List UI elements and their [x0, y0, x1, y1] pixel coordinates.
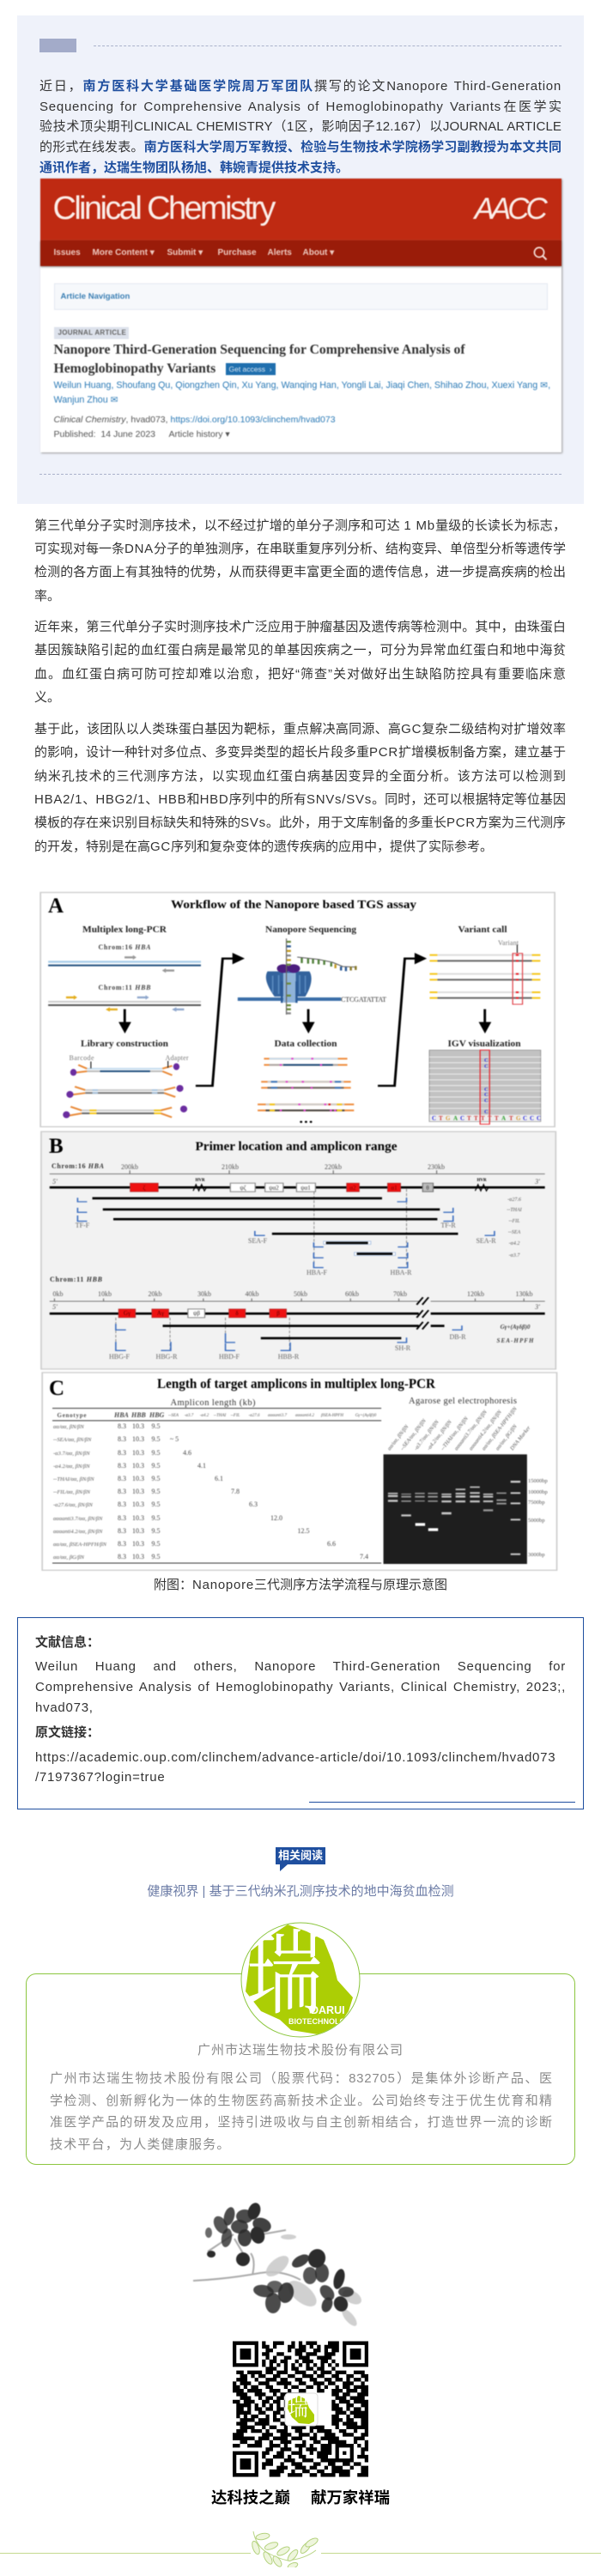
journal screenshot: Article history ▾: [168, 429, 230, 439]
journal screenshot: Wanjun Zhou ✉: [53, 395, 118, 405]
panel B labels: 230kb: [428, 1163, 445, 1171]
panel B labels: DB-R: [449, 1333, 466, 1341]
gel size labels: 5000bp: [528, 1518, 544, 1524]
related article link: 健康视界 | 基于三代纳米孔测序技术的地中海贫血检测: [147, 1884, 454, 1899]
HBA axis and gene line: [50, 1170, 545, 1191]
panel B labels: 50kb: [294, 1290, 307, 1298]
panel A labels: Chrom:16 HBA: [98, 943, 151, 951]
panel B labels: SEA-HPFH: [496, 1337, 534, 1344]
panel B labels: 130kb: [515, 1290, 532, 1298]
panel B labels: --SEA: [508, 1230, 520, 1235]
panel B labels: 70kb: [393, 1290, 407, 1298]
figure: workflow, primers and amplicons: [39, 891, 558, 1571]
panel B labels: 120kb: [467, 1290, 484, 1298]
citation text: Weilun Huang and others, Nanopore Third-Generation Sequencing for: [35, 1659, 566, 1674]
journal nav bar: [39, 240, 562, 266]
table values: 8.3: [118, 1540, 126, 1548]
gel size labels: 3000bp: [528, 1552, 544, 1558]
panel A labels: Chrom:11 HBB: [98, 984, 151, 991]
icon: Darui logo: BIOTECHNOLOGY: [288, 2017, 357, 2026]
table genotypes: -α27.6/αα, βN/βN: [53, 1502, 93, 1508]
table values: 10.3: [132, 1475, 144, 1482]
text block: intro paragraph: 通讯作者，达瑞生物团队杨旭、韩婉青提供技术支持。: [39, 161, 349, 175]
gel lane labels: αα/αα, βSEA-HPFH/βN: [481, 1406, 519, 1452]
panel B labels: α1: [391, 1185, 398, 1191]
leaves: [263, 2234, 364, 2328]
text block: body paragraph 3: 的开发，特别是在高GC序列和复杂变体的遗传疾病的应用中，提供了实际参考。: [34, 839, 493, 854]
panel B labels: TF-F: [76, 1221, 90, 1229]
slogan: 献万家祥瑞: [311, 2486, 390, 2508]
table genotypes: αα/αα, βG/βN: [53, 1555, 85, 1561]
slogan: 达科技之巅: [211, 2486, 290, 2508]
panel: company profile: [26, 1973, 575, 2165]
company description: [50, 2071, 552, 2152]
library strands: [64, 1061, 175, 1118]
table header: --FIL: [231, 1414, 240, 1418]
gel size labels: [528, 1478, 548, 1558]
journal screenshot: [39, 179, 562, 452]
text block: body paragraph 3: 基于此，该团队以人类珠蛋白基因为靶标，重点解决高同源、高GC复杂二级结构对扩增效率: [34, 722, 566, 736]
text block: body paragraph 1: [34, 518, 566, 603]
gel size labels: 10000bp: [528, 1489, 548, 1495]
text block: intro paragraph: 近日，南方医科大学基础医学院周万军团队撰写的论文Nanopore Third-Generation: [39, 79, 562, 94]
panel: reference info: [17, 1617, 584, 1809]
table values: 9.5: [151, 1475, 160, 1482]
gel lane labels: [386, 1406, 532, 1452]
gel lane labels: --THAI/αα, βN/βN: [440, 1415, 470, 1452]
journal header bar: [39, 179, 562, 240]
gel lane labels: αααanti3.7/αα, βN/βN: [453, 1409, 489, 1452]
table values: 8.3: [118, 1553, 126, 1561]
panel B labels: HBG-F: [109, 1353, 131, 1361]
gel lane labels: -α4.2/αα, βN/βN: [426, 1419, 453, 1452]
panel A labels: Data collection: [275, 1039, 337, 1049]
gel size labels: 7500bp: [528, 1500, 544, 1506]
text block: body paragraph 2: [34, 620, 566, 705]
panel B labels: HVR: [477, 1179, 487, 1183]
panel B labels: Chrom:16 HBA: [52, 1162, 105, 1170]
table values: 10.3: [132, 1500, 144, 1508]
icon: ink flower branch: [192, 2203, 362, 2326]
table values: 9.5: [151, 1488, 160, 1495]
table values: ~ 5: [170, 1435, 179, 1443]
panel B labels: 20kb: [148, 1290, 161, 1298]
panel B labels: Gγ+(Aγδβ)0: [501, 1324, 531, 1330]
table values: 9.5: [151, 1500, 160, 1508]
table values: 8.3: [118, 1435, 126, 1443]
source link url: https://academic.oup.com/clinchem/advance-article/doi/10.1093/clinchem/hvad073: [35, 1750, 555, 1765]
company description: 技术平台，为人类健康服务。: [50, 2137, 231, 2152]
table values: 8.3: [118, 1488, 126, 1495]
table values: 4.6: [183, 1449, 191, 1457]
text block: intro paragraph: 的形式在线发表。南方医科大学周万军教授、检验与生物技术学院杨学习副教授为本文共同: [39, 140, 562, 155]
nanopore illustration: [238, 938, 357, 1015]
panel C labels: C: [49, 1377, 64, 1400]
panel A labels: Barcode: [69, 1054, 94, 1062]
panel B labels: δ: [235, 1310, 239, 1317]
table header: Gγ+(Aγδβ)0: [355, 1414, 377, 1418]
panel B labels: SH-R: [395, 1344, 411, 1352]
table values: 10.3: [132, 1553, 144, 1561]
table values: 10.3: [132, 1514, 144, 1522]
icon: leaf sprig: [252, 2531, 319, 2567]
journal name: Clinical Chemistry: [53, 191, 274, 227]
panel A labels: Nanopore Sequencing: [265, 924, 357, 935]
table values: 10.3: [132, 1462, 144, 1470]
AACC logo: AACC: [474, 192, 544, 226]
related reading tag: 相关阅读: [278, 1849, 323, 1862]
panel B labels: 3': [534, 1178, 540, 1185]
citation: Clinical Chemistry, hvad073, https://doi.org/10.1093/clinchem/hvad073: [53, 415, 336, 425]
table header: HBB: [131, 1411, 147, 1419]
panel B labels: β: [276, 1310, 280, 1317]
journal article tag: JOURNAL ARTICLE: [58, 329, 126, 336]
text block: body paragraph 2: 血。血红蛋白病可防可控却难以治愈，把好“筛查”关对做好出生缺陷防控具有重要临床意: [34, 667, 566, 682]
panel B labels: 60kb: [345, 1290, 359, 1298]
table values: 9.5: [151, 1527, 160, 1535]
table header: -α27.6: [248, 1414, 260, 1418]
text block: intro paragraph: 验技术顶尖期刊CLINICAL CHEMISTRY（1区，影响因子12.167）以JOURNAL ARTICLE: [39, 119, 562, 134]
arrow: data to variant call: [378, 953, 427, 1086]
text block: body paragraph 1: 第三代单分子实时测序技术，以不经过扩增的单分子测序和可达 1 Mb量级的长读长为标志，: [34, 518, 566, 533]
panel B labels: HVR: [195, 1179, 205, 1183]
table header: αααanti3.7: [268, 1414, 287, 1418]
panel B labels: 5': [52, 1178, 58, 1185]
table genotypes: --FIL/αα, βN/βN: [53, 1489, 91, 1495]
journal nav bar: About ▾: [302, 248, 334, 258]
panel B labels: -α27.6: [507, 1197, 521, 1203]
journal nav bar: Purchase: [218, 248, 257, 258]
table header: HBG: [149, 1411, 165, 1419]
panel A labels: CTCGATATTAT: [341, 996, 386, 1003]
table genotypes: [53, 1424, 107, 1561]
branch: [193, 2230, 300, 2281]
table header: αααanti4.2: [295, 1414, 314, 1418]
arrow: library to sequencing: [196, 953, 245, 1086]
table values: 8.3: [118, 1449, 126, 1457]
panel A labels: CCCCCC: [484, 1058, 489, 1115]
panel B labels: 0kb: [53, 1290, 64, 1298]
panel B labels: 5': [52, 1303, 58, 1311]
panel B labels: ζ: [143, 1185, 146, 1191]
table header: HBA: [113, 1411, 130, 1419]
text block: intro paragraph: [39, 79, 562, 175]
gel image: [384, 1454, 527, 1564]
table genotypes: αααanti3.7/αα, βN/βN: [53, 1516, 103, 1522]
table values: [118, 1422, 368, 1561]
table values: 9.5: [151, 1435, 160, 1443]
panel B labels: θ: [426, 1185, 429, 1191]
adapter motor proteins: [63, 1064, 187, 1118]
gel size labels: 15000bp: [528, 1478, 548, 1484]
company description: 广州市达瑞生物技术股份有限公司（股票代码：832705）是集体外诊断产品、医: [50, 2071, 552, 2086]
panel B labels: SEA-F: [248, 1237, 268, 1245]
arrow: down to data collection: [302, 1009, 315, 1033]
panel C labels: Agarose gel electrophoresis: [409, 1397, 517, 1406]
table values: 8.3: [118, 1514, 126, 1522]
table genotypes: -α4.2/αα, βN/βN: [53, 1464, 90, 1470]
panel C: length of target amplicons: [42, 1373, 557, 1570]
underline accent: [309, 1802, 575, 1803]
table genotypes: --SEA/αα, βN/βN: [53, 1437, 92, 1443]
table header: -α4.2: [200, 1414, 209, 1418]
QR code: [233, 2342, 368, 2477]
HBB amplicon bars: [163, 1324, 445, 1339]
panel B labels: α2: [349, 1185, 356, 1191]
article title: Nanopore Third-Generation Sequencing for Comprehensive Analysis of: [53, 342, 465, 357]
gel lane labels: -α3.7/αα, βN/βN: [413, 1419, 440, 1452]
table values: 7.4: [360, 1553, 368, 1561]
panel B labels: 220kb: [325, 1163, 342, 1171]
panel B labels: TF-R: [440, 1221, 456, 1229]
panel C labels: [49, 1377, 548, 1561]
table values: 6.3: [249, 1500, 258, 1508]
text block: body paragraph 1: 率。: [34, 589, 60, 603]
panel B labels: Primer location and amplicon range: [196, 1140, 398, 1154]
HBB strands: [48, 995, 201, 1012]
panel B labels: Aγ: [157, 1310, 164, 1317]
journal article tag: [53, 327, 129, 339]
tag block: [39, 39, 76, 52]
table genotypes: αα/αα, βN/βN: [53, 1424, 84, 1430]
table values: 10.3: [132, 1422, 144, 1430]
panel B: primer location and amplicon range: [41, 1131, 555, 1369]
gel lane labels: αα/αα, βG/βN: [495, 1423, 519, 1452]
text block: body paragraph 2: 近年来，第三代单分子实时测序技术广泛应用于肿瘤基因及遗传病等检测中。其中，由珠蛋白: [34, 620, 566, 634]
panel B labels: 10kb: [98, 1290, 112, 1298]
table header: --THAI: [214, 1414, 227, 1418]
panel B labels: HBB-R: [278, 1353, 300, 1361]
authors: Weilun Huang, Shoufang Qu, Qiongzhen Qin, Xu Yang, Wanqing Han, Yongli Lai, Jiaqi Chen, Shihao Zhou, Xuexi Yang ✉,: [53, 380, 550, 391]
HBB primers: [116, 1324, 462, 1350]
arrow: down to IGV: [479, 1009, 491, 1033]
table values: 8.3: [118, 1462, 126, 1470]
data collection reads: [258, 1058, 354, 1111]
icon: search: [532, 245, 548, 261]
table genotypes: --THAI/αα, βN/βN: [53, 1476, 94, 1482]
get access button: Get access ›: [228, 365, 272, 373]
article navigation box: Article Navigation: [60, 292, 130, 301]
citation text: [35, 1659, 566, 1715]
table values: 10.3: [132, 1527, 144, 1535]
panel B labels: --THAI: [507, 1208, 523, 1213]
table header: -α3.7: [185, 1414, 194, 1418]
panel: intro background: [17, 15, 584, 504]
slogan: [211, 2486, 390, 2508]
HBA guide lines: [314, 1189, 406, 1264]
text block: body paragraph 2: 基因簇缺陷引起的血红蛋白病是最常见的单基因疾病之一，可分为异常血红蛋白和地中海贫: [34, 643, 566, 658]
table values: 9.5: [151, 1553, 160, 1561]
panel B labels: 210kb: [222, 1163, 239, 1171]
text block: intro paragraph: Sequencing for Comprehensive Analysis of Hemoglobinopathy Variants在医学实: [39, 100, 562, 114]
table values: 10.3: [132, 1435, 144, 1443]
panel A labels: A: [48, 894, 64, 918]
panel B labels: -α4.2: [509, 1240, 519, 1246]
icon: QR center logo: [285, 2392, 318, 2426]
panel B labels: ψα2: [269, 1185, 279, 1191]
table values: 7.8: [231, 1488, 240, 1495]
icon: Darui logo: DARUI: [311, 2004, 345, 2016]
company description: 准医学产品的研发及应用，坚持引进吸收与自主创新相结合，打造世界一流的诊断: [50, 2115, 552, 2130]
panel A: workflow of the Nanopore based TGS assay: [40, 893, 555, 1127]
article navigation box: [53, 283, 548, 310]
figure caption: 附图：Nanopore三代测序方法学流程与原理示意图: [154, 1578, 447, 1592]
table values: 10.3: [132, 1449, 144, 1457]
table values: 6.1: [215, 1475, 223, 1482]
table header: [57, 1411, 377, 1419]
text block: body paragraph 3: HBA2/1、HBG2/1、HBB和HBD序列中的所有SNVs/SVs。同时，还可以根据特定等位基因: [34, 792, 566, 807]
panel A labels: Variant: [498, 939, 519, 947]
heading: reference info: 文献信息：: [35, 1635, 100, 1650]
panel B labels: 200kb: [121, 1163, 138, 1171]
journal screenshot: Hemoglobinopathy Variants: [53, 361, 216, 376]
HBA strands: [48, 955, 201, 973]
table values: 9.5: [151, 1422, 160, 1430]
table genotypes: αα/αα, βSEA-HPFH/βN: [53, 1542, 107, 1548]
HBA amplicon bars: [93, 1197, 458, 1256]
panel A labels: Multiplex long-PCR: [82, 924, 167, 935]
table values: 12.5: [297, 1527, 309, 1535]
company name: 广州市达瑞生物技术股份有限公司: [197, 2043, 404, 2058]
source link url: /7197367?login=true: [35, 1770, 165, 1785]
table header: Genotype: [57, 1412, 86, 1419]
published date: Published: 14 June 2023: [53, 429, 155, 439]
ellipsis dots: [300, 1121, 313, 1123]
table values: 10.3: [132, 1540, 144, 1548]
table values: 9.5: [151, 1449, 160, 1457]
IGV plot: [429, 1050, 541, 1124]
panel B labels: --FIL: [508, 1219, 520, 1224]
table header: --SEA: [168, 1414, 179, 1418]
panel B labels: HBA-R: [391, 1269, 412, 1276]
panel B labels: -α3.7: [509, 1253, 520, 1258]
panel A labels: C T G A C TTTTT A T G CCC: [432, 1115, 541, 1122]
panel B labels: HBA-F: [307, 1269, 328, 1276]
HBB guide lines: [116, 1318, 289, 1350]
text block: body paragraph 1: 可实现对每一条DNA分子的单独测序，在串联重复序列分析、结构变异、单倍型分析等遗传学: [34, 542, 566, 556]
table values: 12.0: [270, 1514, 282, 1522]
get access button: [225, 363, 275, 375]
table values: 8.3: [118, 1422, 126, 1430]
journal nav bar: More Content ▾: [93, 248, 155, 258]
journal nav bar: Alerts: [268, 248, 292, 258]
panel B labels: B: [49, 1135, 64, 1158]
panel B labels: ψβ: [193, 1310, 200, 1317]
table header: βSEA-HPFH: [320, 1414, 343, 1418]
table values: 10.3: [132, 1488, 144, 1495]
text block: body paragraph 2: 义。: [34, 690, 60, 705]
table values: 4.1: [197, 1462, 206, 1470]
panel A labels: Workflow of the Nanopore based TGS assay: [171, 899, 416, 912]
table values: 8.3: [118, 1500, 126, 1508]
panel C labels: Amplicon length (kb): [170, 1398, 256, 1408]
text block: body paragraph 1: 检测的各方面上有其独特的优势，从而获得更丰富更全面的遗传信息，进一步提高疾病的检出: [34, 565, 566, 579]
table values: 6.6: [327, 1540, 336, 1548]
citation text: hvad073,: [35, 1700, 94, 1715]
related reading tag: [276, 1847, 325, 1871]
text block: body paragraph 3: 纳米孔技术的三代测序方法，以实现血红蛋白病基因变异的全面分析。该方法可以检测到: [34, 769, 566, 784]
panel B labels: [49, 1135, 540, 1361]
gel lane labels: αα/αα, βN/βN: [386, 1423, 410, 1452]
gel lane labels: αααanti4.2/αα, βN/βN: [468, 1409, 503, 1452]
text block: body paragraph 3: 模板的存在来识别目标缺失和特殊的SVs。此外，用于文库制备的多重长PCR方案为三代测序: [34, 815, 566, 830]
table values: 8.3: [118, 1475, 126, 1482]
HBB axis and gene line: [50, 1299, 545, 1318]
arrow: down to library: [118, 1009, 131, 1033]
panel B labels: Chrom:11 HBB: [50, 1276, 103, 1283]
top dashed rule: [94, 45, 562, 46]
panel B labels: HBD-F: [219, 1353, 240, 1361]
icon: Darui logo: [240, 1923, 361, 2038]
panel B labels: Gγ: [124, 1310, 131, 1317]
panel B labels: ψα1: [300, 1185, 311, 1191]
text block: body paragraph 3: [34, 722, 566, 854]
table genotypes: αααanti4.2/αα, βN/βN: [53, 1529, 103, 1535]
panel A labels: Adapter: [165, 1054, 189, 1062]
citation text: Comprehensive Analysis of Hemoglobinopathy Variants, Clinical Chemistry, 2023;,: [35, 1680, 566, 1694]
nav items: Issues: [53, 248, 81, 258]
source link url: [35, 1750, 555, 1785]
table values: 9.5: [151, 1462, 160, 1470]
panel C labels: Length of target amplicons in multiplex long-PCR: [157, 1377, 436, 1391]
gel lane labels: --SEA/αα, βN/βN: [399, 1417, 428, 1452]
panel A labels: [48, 894, 541, 1122]
variant reads: [429, 945, 540, 1004]
text block: body paragraph 3: 的影响，设计一种针对多位点、多变异类型的超长片段多重PCR扩增模板制备方案，建立基于: [34, 745, 566, 760]
footer divider with leaves: [0, 2531, 601, 2567]
panel B labels: HBG-R: [156, 1353, 178, 1361]
table values: 9.5: [151, 1540, 160, 1548]
table values: 8.3: [118, 1527, 126, 1535]
table genotypes: -α3.7/αα, βN/βN: [53, 1451, 90, 1457]
panel A labels: Library construction: [81, 1039, 168, 1049]
axis break marks: [416, 1296, 431, 1330]
panel B labels: 30kb: [197, 1290, 211, 1298]
panel A labels: Variant call: [458, 924, 507, 935]
flowers: [205, 2201, 354, 2314]
company description: 学检测、创新孵化为一体的生物医药高新技术企业。公司始终专注于优生优育和精: [50, 2094, 552, 2108]
panel B labels: SEA-R: [476, 1237, 496, 1245]
heading: source link: 原文链接：: [35, 1725, 100, 1740]
HBA primers: [77, 1197, 495, 1268]
table rules: [52, 1409, 381, 1563]
panel B labels: 3': [534, 1303, 540, 1311]
bottom dashed rule: [39, 474, 562, 475]
panel B labels: 40kb: [246, 1290, 259, 1298]
panel B labels: ψζ: [240, 1185, 246, 1191]
gel lane labels: DNA Marker: [508, 1425, 532, 1452]
table values: 9.5: [151, 1514, 160, 1522]
panel A labels: IGV visualization: [448, 1039, 520, 1049]
journal nav bar: Submit ▾: [167, 248, 203, 258]
